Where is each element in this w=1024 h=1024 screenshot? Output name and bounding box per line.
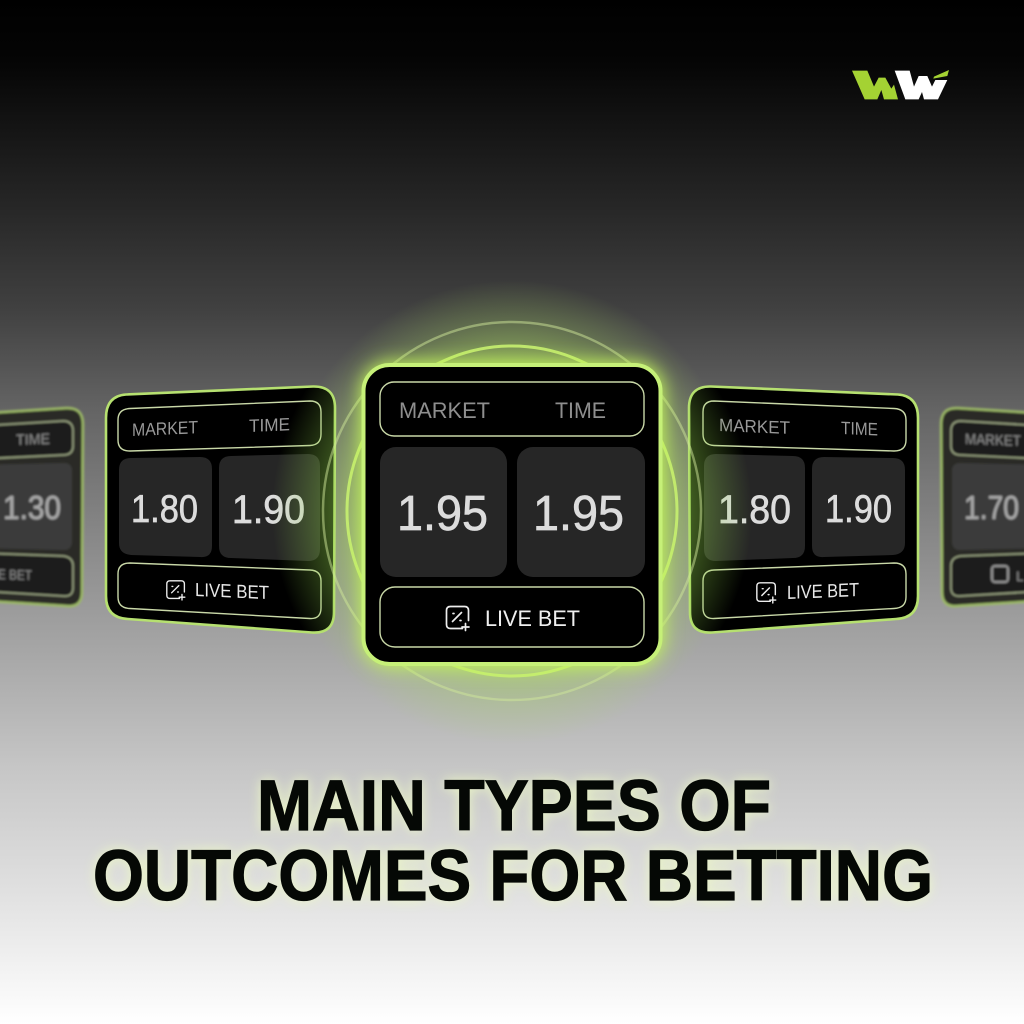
title	[93, 767, 933, 916]
far left odds tile: 1.30	[3, 489, 61, 526]
right card green spill	[689, 386, 918, 633]
left card header bar: TIME	[249, 414, 290, 436]
right card live bet bar	[703, 563, 906, 619]
concentric glow rings	[323, 322, 701, 700]
center card	[364, 365, 660, 664]
center header bar: MARKET	[399, 398, 490, 423]
left card header bar	[118, 401, 321, 451]
left card icon	[167, 581, 185, 600]
center odds tile right	[517, 447, 645, 577]
title: OUTCOMES FOR BETTING	[93, 837, 933, 916]
far left odds tile	[0, 463, 72, 550]
far left market bar: TIME	[16, 431, 50, 449]
right card odds tile 1.80	[704, 454, 805, 561]
center header bar	[380, 382, 644, 436]
left card odds tile 1.80: 1.80	[131, 488, 198, 531]
left card header bar: MARKET	[132, 417, 198, 440]
center live bet bar: LIVE BET	[485, 606, 580, 631]
green halo behind center card	[280, 280, 744, 744]
left card live bet bar: LIVE BET	[195, 580, 269, 604]
far left card	[0, 408, 83, 606]
center odds tile right: 1.95	[533, 487, 624, 541]
far right market bar	[951, 421, 1024, 459]
right card header bar	[703, 401, 906, 451]
right card header bar: TIME	[841, 418, 878, 440]
far left live bet bar	[0, 553, 73, 596]
right card icon	[757, 583, 776, 603]
right card odds tile 1.90: 1.90	[825, 488, 892, 531]
center icon	[446, 606, 469, 630]
left card	[106, 386, 335, 633]
right card odds tile 1.90	[812, 457, 905, 557]
title: MAIN TYPES OF	[257, 767, 771, 846]
left card odds tile 1.90	[219, 454, 320, 561]
far right live bet bar	[951, 553, 1024, 596]
right card header bar: MARKET	[719, 415, 790, 438]
left card live bet bar	[118, 563, 321, 619]
center odds tile left	[380, 447, 507, 577]
left card green spill	[106, 386, 335, 633]
far left market bar	[0, 421, 73, 459]
right card	[689, 386, 918, 633]
left card odds tile 1.90: 1.90	[232, 488, 305, 532]
right card odds tile 1.80: 1.80	[718, 488, 791, 532]
far right live bet bar: L	[1016, 568, 1024, 584]
center odds tile left: 1.95	[397, 487, 488, 541]
logo	[852, 70, 949, 99]
center header bar: TIME	[555, 398, 606, 423]
far right odds tile	[952, 463, 1024, 550]
center card glow	[361, 362, 664, 667]
right card live bet bar: LIVE BET	[787, 580, 859, 604]
far right card	[941, 408, 1024, 606]
left card odds tile 1.80	[119, 457, 212, 557]
center live bet bar	[380, 587, 644, 647]
